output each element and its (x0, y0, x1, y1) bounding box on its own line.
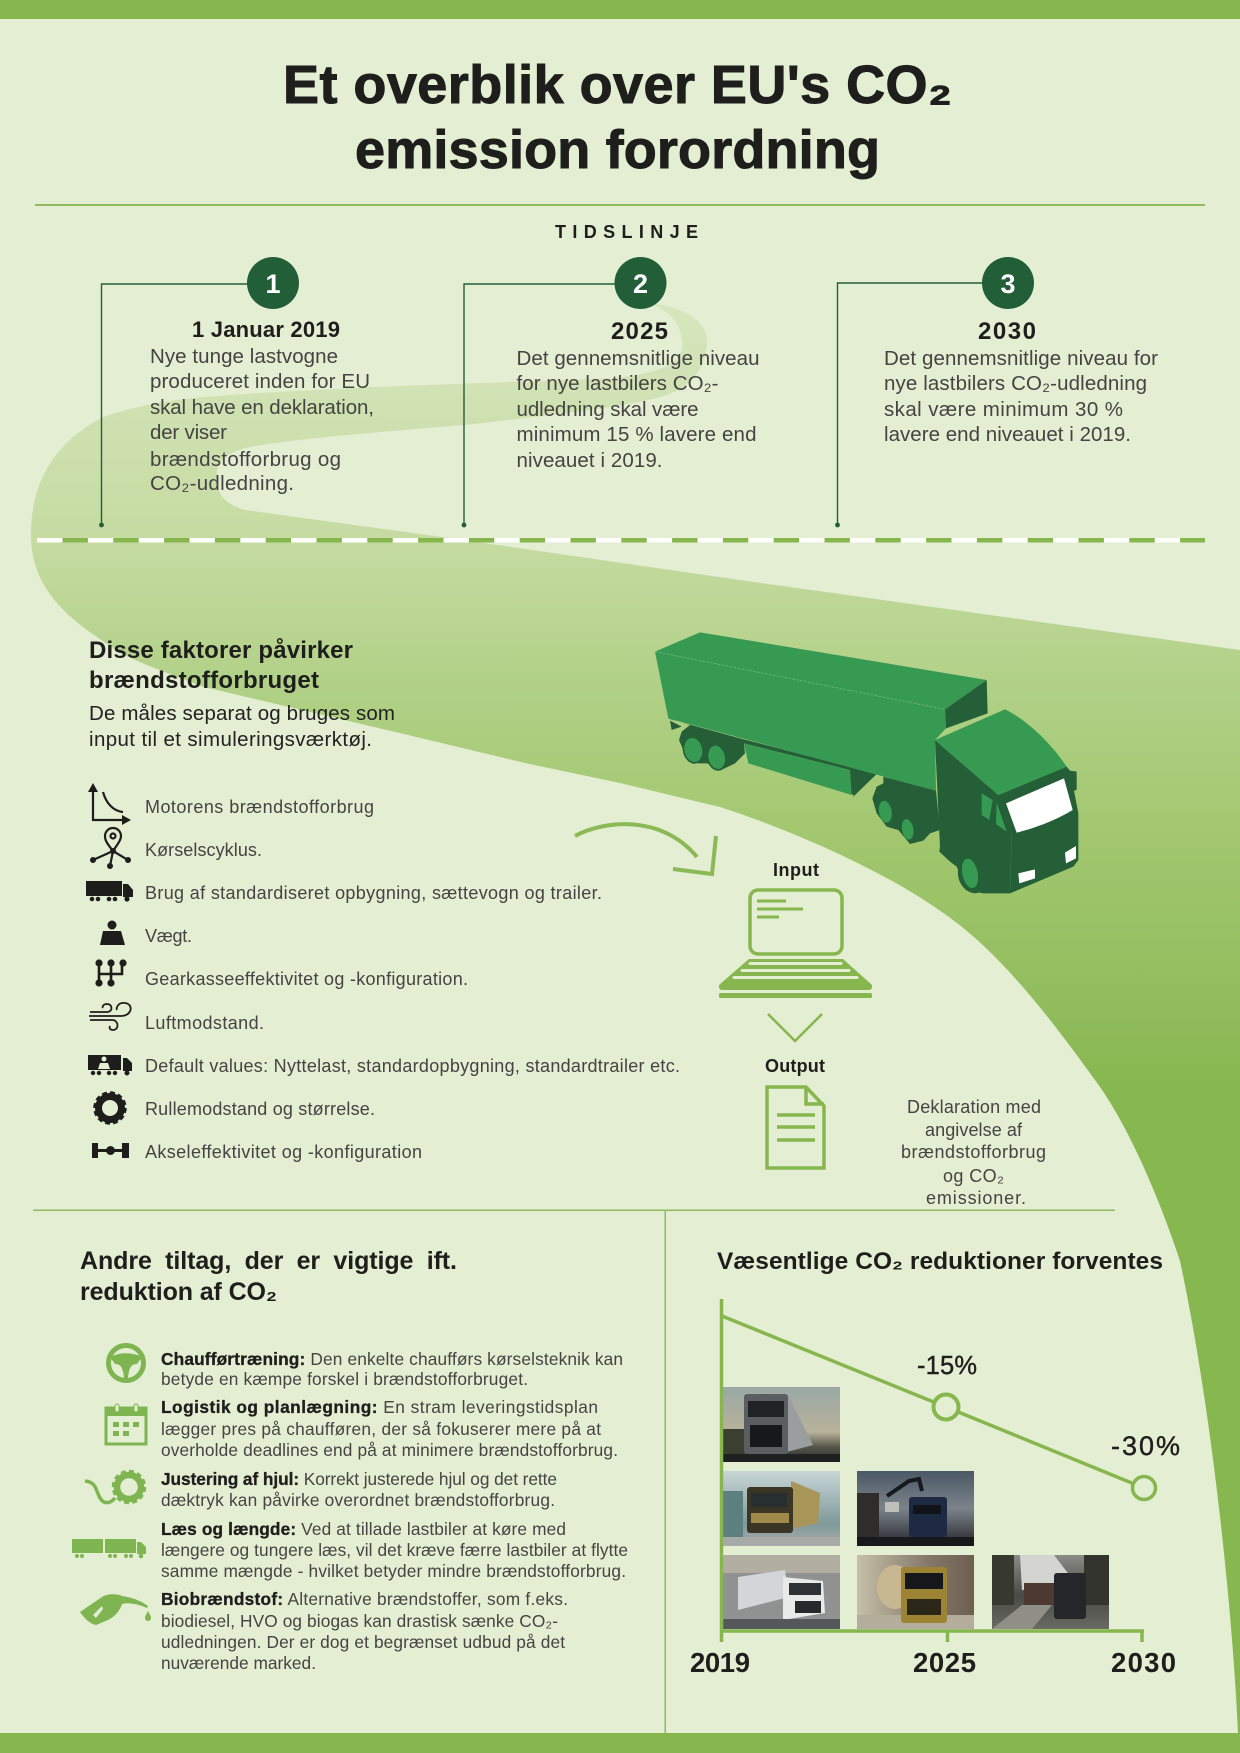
factor: driving cycle: Kørselscyklus. (145, 840, 262, 860)
icon: laptop (719, 890, 872, 998)
section heading: factors: brændstofforbruget (89, 667, 319, 694)
heading: other measures: reduktion af CO₂ (80, 1278, 277, 1306)
output description: emissioner. (926, 1188, 1026, 1208)
timeline item 1: CO₂-udledning. (150, 472, 294, 495)
panel: factor list (86, 783, 680, 1162)
icon: steering wheel (108, 1346, 144, 1380)
measure: logistics: overholde deadlines end på at minimere brændstofforbrug. (161, 1440, 618, 1460)
output description: Deklaration med (907, 1097, 1041, 1117)
title: Et overblik over EU's CO₂ (283, 55, 952, 115)
measure: biofuel: Biobrændstof: Alternative brændstoffer, som f.eks. (161, 1589, 568, 1609)
output description: angivelse af (925, 1120, 1023, 1140)
timeline item 1 (99, 257, 374, 527)
icon: document (767, 1087, 824, 1168)
tractor cab (935, 709, 1078, 896)
factor: gearbox: Gearkasseeffektivitet og -konfiguration. (145, 969, 468, 989)
timeline item 3: 2030 (978, 318, 1036, 345)
measure: load and length: samme mængde - hvilket betyder mindre brændstofforbrug. (161, 1561, 626, 1581)
tractor rear wheels (872, 777, 940, 844)
measure: biofuel: biodiesel, HVO og biogas kan drastisk sænke CO₂- (161, 1611, 558, 1631)
factor: standard body: Brug af standardiseret opbygning, sættevogn og trailer. (145, 883, 602, 903)
timeline item 2: udledning skal være (516, 398, 698, 421)
timeline item 3: nye lastbilers CO₂-udledning (884, 372, 1147, 395)
panel: timeline (37, 222, 1205, 542)
timeline item 3 (835, 257, 1158, 527)
factor: rolling resistance: Rullemodstand og størrelse. (145, 1099, 375, 1119)
heading: other measures (80, 1247, 457, 1306)
timeline item 1: der viser (150, 421, 227, 444)
truck underside and rear wheels (668, 718, 877, 797)
input label: Input (773, 860, 819, 880)
timeline item 3: 3 (1000, 269, 1016, 299)
section heading: factors: De måles separat og bruges som (89, 702, 395, 725)
photo: truck 2 (723, 1471, 840, 1546)
measure: wheel alignment: dæktryk kan påvirke overordnet brændstofforbrug. (161, 1490, 555, 1510)
icon: calendar (106, 1404, 146, 1444)
side skirt (744, 743, 852, 795)
timeline item 1: produceret inden for EU (150, 370, 370, 393)
section heading: factors: Disse faktorer påvirker (89, 637, 353, 664)
measure: biofuel: nuværende marked. (161, 1653, 316, 1673)
line chart: 2025 (913, 1647, 976, 1678)
dashed timeline road marking (37, 538, 1205, 542)
timeline item 2: 2025 (611, 318, 668, 345)
timeline item 1: 1 Januar 2019 (192, 317, 340, 342)
timeline item 1: Nye tunge lastvogne (150, 345, 338, 368)
timeline item 3: skal være minimum 30 % (884, 398, 1123, 421)
measure: driver training: Chaufførtræning: Den enkelte chaufførs kørselsteknik kan (161, 1349, 623, 1369)
illustration: green truck (655, 632, 1078, 896)
timeline item 2: Det gennemsnitlige niveau (516, 347, 760, 370)
icon: axle (92, 1143, 129, 1158)
factor: weight: Vægt. (145, 926, 192, 946)
icon: engine curve (88, 783, 131, 825)
measure: logistics: Logistik og planlægning: En stram leveringstidsplan (161, 1397, 598, 1417)
icon: tyre (94, 1092, 126, 1124)
timeline item 1: skal have en deklaration, (150, 396, 374, 419)
icon: driving cycle (90, 828, 131, 869)
trailer (655, 632, 987, 791)
timeline item 2: niveauet i 2019. (516, 449, 662, 472)
panel: input and output (719, 860, 1046, 1208)
heading: other measures: Andre tiltag, der er vigtige ift. (80, 1247, 457, 1275)
factor: axle: Akseleffektivitet og -konfiguration (145, 1142, 422, 1162)
timeline heading: TIDSLINJE (555, 222, 698, 242)
measure: load and length: længere og tungere læs, vil det kræve færre lastbiler at flytte (161, 1540, 628, 1560)
line chart: -15% (917, 1352, 977, 1380)
icon: gearbox (95, 959, 127, 987)
line chart: -30% (1111, 1431, 1180, 1461)
measure: logistics: lægger pres på chaufføren, der så fokuserer mere på at (161, 1419, 601, 1439)
measure: load and length (161, 1519, 628, 1581)
line chart: 2019 (690, 1647, 750, 1678)
panel: other measures (72, 1247, 628, 1673)
measure: wheel alignment: Justering af hjul: Korrekt justerede hjul og det rette (161, 1469, 557, 1489)
line chart: 2030 (1111, 1647, 1176, 1678)
title (283, 55, 952, 180)
section heading: factors (89, 637, 395, 751)
icon: truck (86, 881, 133, 902)
arrow: input to output (768, 1014, 822, 1041)
top band (0, 0, 1240, 19)
output description: og CO₂ (943, 1166, 1004, 1186)
timeline item 1: 1 (265, 269, 281, 299)
arrow: factors to input (575, 824, 716, 874)
timeline item 2: minimum 15 % lavere end (516, 423, 756, 446)
photo: truck 5 (857, 1555, 974, 1629)
icon: truck with load (88, 1055, 132, 1076)
timeline item 2 (462, 257, 760, 527)
photo: truck 4 (857, 1471, 974, 1546)
measure: driver training (161, 1349, 623, 1389)
bottom band (0, 1733, 1240, 1753)
measure: load and length: Læs og længde: Ved at tillade lastbiler at køre med (161, 1519, 566, 1539)
measure: wheel alignment (161, 1469, 557, 1510)
road illustration (31, 303, 1240, 1733)
factor: engine: Motorens brændstofforbrug (145, 797, 374, 817)
factor: air resistance: Luftmodstand. (145, 1013, 264, 1033)
icon: wheel alignment (85, 1471, 145, 1503)
factor: default values: Default values: Nyttelast, standardopbygning, standardtrailer etc. (145, 1056, 680, 1076)
timeline item 3: lavere end niveauet i 2019. (884, 423, 1131, 446)
timeline item 1: brændstofforbrug og (150, 448, 341, 471)
icon: wind (89, 1003, 131, 1030)
photo: truck 6 (992, 1555, 1109, 1629)
output description: brændstofforbrug (901, 1142, 1046, 1162)
line chart (690, 1299, 1180, 1678)
timeline item 3: Det gennemsnitlige niveau for (884, 347, 1158, 370)
output description (901, 1097, 1046, 1208)
output label: Output (765, 1056, 825, 1076)
measure: driver training: betyde en kæmpe forskel i brændstofforbruget. (161, 1369, 528, 1389)
title: emission forordning (355, 120, 880, 180)
timeline item 2: for nye lastbilers CO₂- (516, 372, 718, 395)
photo: truck 1 (723, 1387, 840, 1462)
photo: truck 3 (723, 1555, 840, 1629)
icon: long truck (72, 1539, 146, 1558)
icon: weight (100, 920, 125, 945)
measure: biofuel: udledningen. Der er dog et begrænset udbud på det (161, 1632, 565, 1652)
panel: reductions chart (690, 1248, 1180, 1678)
icon: fuel nozzle (80, 1594, 151, 1625)
section heading: factors: input til et simuleringsværktøj. (89, 728, 372, 751)
measure: biofuel (161, 1589, 568, 1673)
chart heading: Væsentlige CO₂ reduktioner forventes (717, 1248, 1163, 1275)
timeline item 2: 2 (633, 269, 648, 299)
measure: logistics (161, 1397, 618, 1460)
